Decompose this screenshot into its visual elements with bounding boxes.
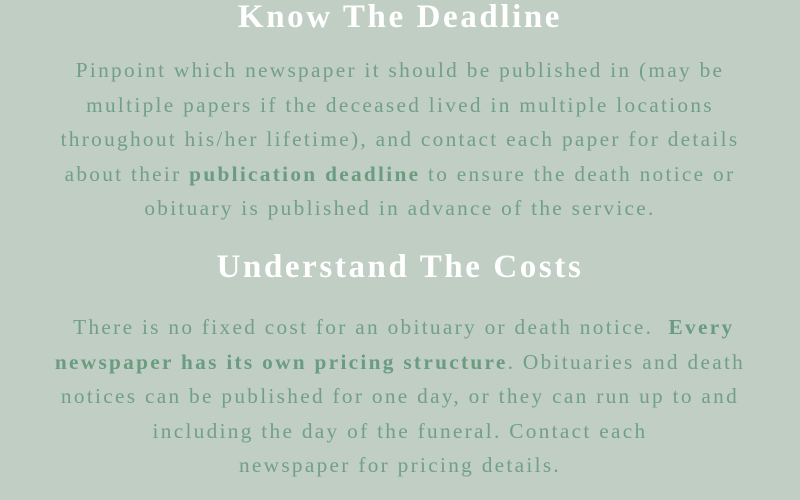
text block: costs description: notices can be published for one day, or they can run up to and bbox=[61, 384, 739, 408]
text block: deadline description: multiple papers if the deceased lived in multiple locations bbox=[86, 92, 714, 116]
text block: costs description bbox=[55, 315, 745, 477]
text block: deadline description: throughout his/her lifetime), and contact each paper for details bbox=[61, 127, 739, 151]
text block: deadline description: Pinpoint which newspaper it should be published in (may be bbox=[76, 58, 724, 82]
text block: costs description: There is no fixed cost for an obituary or death notice. Every bbox=[73, 315, 734, 339]
text block: deadline description bbox=[60, 58, 739, 220]
text block: deadline description: about their publication deadline to ensure the death notice or bbox=[65, 162, 735, 186]
title: Understand The Costs: Understand The Costs bbox=[217, 249, 583, 285]
text block: costs description: newspaper has its own pricing structure. Obituaries and death bbox=[55, 350, 745, 374]
title: Know The Deadline: Know The Deadline bbox=[238, 0, 562, 35]
text block: costs description: including the day of the funeral. Contact each bbox=[153, 418, 647, 442]
text block: deadline description: obituary is published in advance of the service. bbox=[144, 196, 656, 220]
text block: costs description: newspaper for pricing details. bbox=[239, 453, 561, 477]
